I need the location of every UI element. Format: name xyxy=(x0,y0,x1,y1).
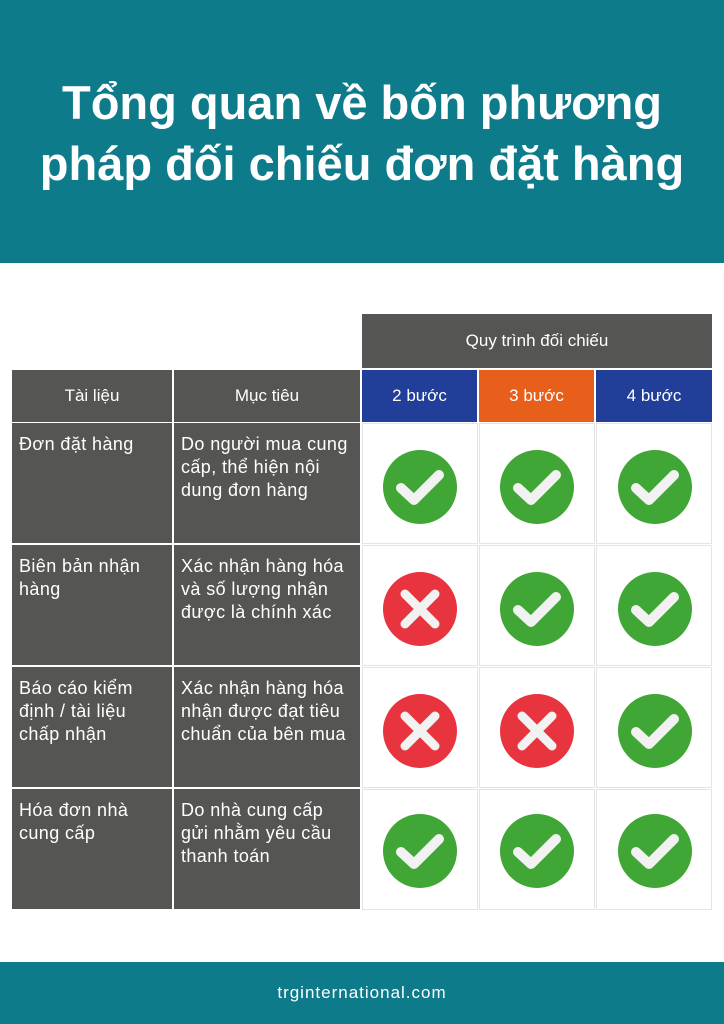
header: Tài liệu: Tài liệu xyxy=(65,386,119,405)
row 4 document: Hóa đơn nhà xyxy=(19,800,128,820)
row 4 document xyxy=(12,789,172,909)
header: Tài liệu xyxy=(12,370,172,422)
row 3 document: định / tài liệu xyxy=(19,701,126,721)
header: Mục tiêu: Mục tiêu xyxy=(235,386,299,405)
header: Quy trình đối chiếu xyxy=(362,314,712,368)
icon: row1 checks xyxy=(383,450,692,524)
header: 3 bước: 3 bước xyxy=(509,386,564,405)
row 2 document: Biên bản nhận xyxy=(19,556,140,576)
row 2 goal xyxy=(174,545,360,665)
row 2 goal: Xác nhận hàng hóa xyxy=(181,556,344,576)
row 1 goal: Do người mua cung xyxy=(181,434,348,454)
row 2 document xyxy=(12,545,172,665)
footer band xyxy=(0,962,724,1024)
title: Tổng quan về bốn phương xyxy=(62,76,662,129)
row 1 goal: cấp, thể hiện nội xyxy=(181,457,320,477)
header: 2 bước: 2 bước xyxy=(392,386,447,405)
footer url: trginternational.com xyxy=(277,983,447,1002)
row 1 goal: dung đơn hàng xyxy=(181,480,308,500)
header band xyxy=(0,0,724,263)
row 4 goal: thanh toán xyxy=(181,846,270,866)
row 1 document: Đơn đặt hàng xyxy=(19,434,134,454)
header: 2 bước xyxy=(362,370,477,422)
row 3 goal: chuẩn của bên mua xyxy=(181,724,346,744)
title: pháp đối chiếu đơn đặt hàng xyxy=(40,137,684,190)
header: 4 bước: 4 bước xyxy=(627,386,681,405)
icon: row3 crosses and check xyxy=(383,694,692,768)
row 4 goal: gửi nhằm yêu cầu xyxy=(181,823,332,843)
row 3 document: Báo cáo kiểm xyxy=(19,678,133,698)
title xyxy=(40,76,684,190)
row 3 goal: nhận được đạt tiêu xyxy=(181,701,340,721)
row 2 goal: được là chính xác xyxy=(181,602,332,622)
row 3 document: chấp nhận xyxy=(19,724,107,744)
icon: row2 cross and checks xyxy=(383,572,692,646)
icon: row4 checks xyxy=(383,814,692,888)
row 3 goal xyxy=(174,667,360,787)
row 1 goal xyxy=(174,423,360,543)
header: 4 bước xyxy=(596,370,712,422)
row 4 document: cung cấp xyxy=(19,823,95,843)
row 2 goal: và số lượng nhận xyxy=(181,579,328,599)
row 4 goal: Do nhà cung cấp xyxy=(181,800,323,820)
row 3 goal: Xác nhận hàng hóa xyxy=(181,678,344,698)
header: Mục tiêu xyxy=(174,370,360,422)
table xyxy=(12,314,712,910)
header: 3 bước xyxy=(479,370,594,422)
row 2 document: hàng xyxy=(19,579,61,599)
row 1 document xyxy=(12,423,172,543)
header: Quy trình đối chiếu: Quy trình đối chiếu xyxy=(466,331,608,350)
icon cells xyxy=(362,423,712,910)
row 4 goal xyxy=(174,789,360,909)
row 3 document xyxy=(12,667,172,787)
